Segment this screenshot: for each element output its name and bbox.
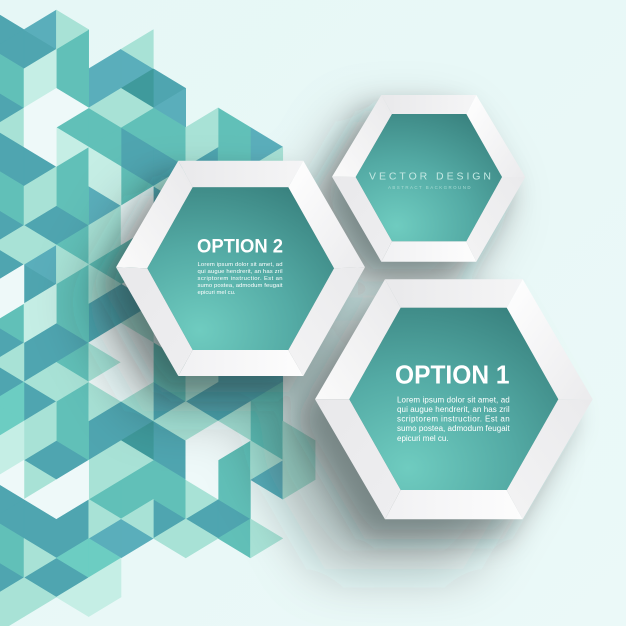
hexagon: option 2: [116, 161, 365, 376]
body text: option 2: epicuri mel cu.: [198, 290, 236, 296]
hexagon: vector design: [332, 95, 525, 262]
frame: option 2: [116, 161, 365, 376]
body text: option 1: scriptorem instructior. Est an: [397, 414, 510, 423]
geometric triangle pattern: [0, 10, 315, 626]
teal panel: vector design: [356, 114, 502, 241]
title: vector design: VECTOR DESIGN: [369, 170, 491, 182]
body text: option 2: sumo postea, admodum feugait: [198, 283, 283, 289]
body text: option 2: scriptorem instructior. Est an: [198, 276, 282, 282]
body text: option 1: [397, 395, 510, 443]
body text: option 2: Lorem ipsum dolor sit amet, ad: [198, 262, 282, 268]
frame: vector design: [332, 95, 525, 262]
heading: option 1: OPTION 1: [395, 360, 510, 390]
body text: option 1: sumo postea, admodum feugait: [397, 424, 510, 433]
body text: option 2: qui augue hendrerit, an has zril: [198, 269, 282, 275]
wide hexagon shadows: [81, 122, 533, 569]
body text: option 1: Lorem ipsum dolor sit amet, ad: [397, 395, 510, 404]
body text: option 1: qui augue hendrerit, an has zril: [397, 405, 510, 414]
teal panel: option 1: [349, 308, 558, 490]
body text: option 2: [198, 262, 283, 296]
tight hexagon shadows: [100, 111, 573, 539]
subtitle: abstract background: ABSTRACT BACKGROUND: [388, 185, 470, 190]
teal panel: option 2: [147, 187, 334, 350]
heading: option 2: OPTION 2: [197, 235, 283, 257]
frame: option 1: [315, 279, 593, 519]
body text: option 1: epicuri mel cu.: [397, 434, 449, 443]
hexagon: option 1: [315, 279, 593, 519]
